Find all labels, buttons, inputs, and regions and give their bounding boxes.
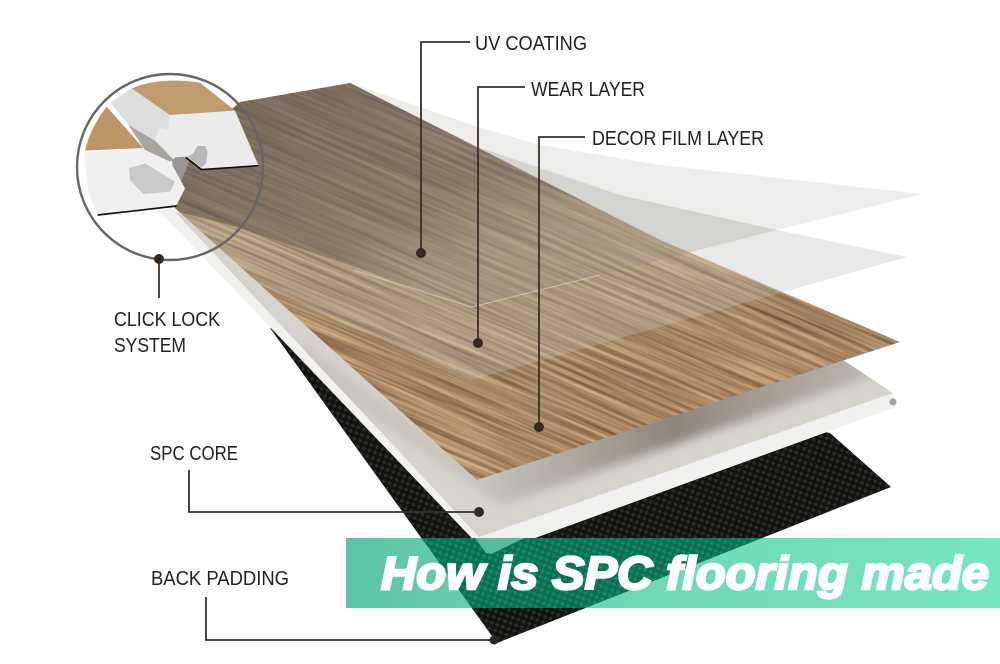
callout: UV coating: [416, 33, 587, 258]
callout: decor film layer: DECOR FILM LAYER: [592, 128, 764, 150]
title banner: [346, 538, 1000, 608]
callout: click lock system: [114, 254, 221, 357]
callout: UV coating: UV COATING: [475, 33, 587, 55]
inset: upper wood: [132, 81, 235, 116]
layer: decor film: [172, 83, 900, 480]
callout: SPC core: SPC CORE: [150, 443, 238, 465]
callout: click lock system: CLICK LOCK: [114, 309, 221, 331]
banner title: How is SPC flooring made: [381, 547, 989, 599]
inset: grey slope: [128, 125, 175, 162]
inset: upper board profile: [155, 111, 258, 169]
highlight: UV sheet edge: [353, 270, 600, 307]
callout: wear layer: [473, 79, 645, 348]
inset: lower wood: [85, 107, 143, 151]
layer: UV and wear overlap: [350, 83, 777, 290]
banner over padding: [422, 538, 762, 608]
inset: upper side face: [111, 88, 170, 141]
inset ring: [77, 74, 263, 260]
click lock inset: [77, 74, 263, 260]
layer: SPC core: [160, 208, 896, 554]
layer: wear sheet: [260, 83, 907, 380]
layer: UV coating sheet: [237, 83, 922, 307]
callout: click lock system: SYSTEM: [114, 335, 186, 357]
inset: lower groove: [129, 163, 175, 194]
callout: wear layer: WEAR LAYER: [531, 79, 645, 101]
inset: upper groove: [187, 146, 208, 167]
callout: SPC core: [150, 443, 484, 517]
callout: back padding: BACK PADDING: [151, 568, 289, 590]
wear overlay on decor: [172, 83, 782, 380]
callout: decor film layer: [534, 128, 764, 432]
inset: black backing lines: [98, 158, 258, 215]
inset: lower board profile: [84, 148, 185, 215]
callout: back padding: [151, 568, 498, 644]
layer: back padding: [270, 328, 891, 643]
UV overlay on decor: [172, 83, 688, 306]
